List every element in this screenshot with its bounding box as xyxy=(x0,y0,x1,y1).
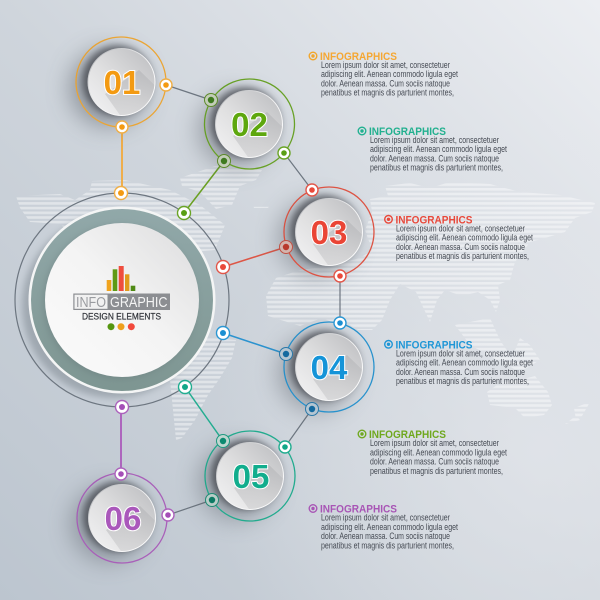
text block 05: dolor. Aenean massa. Cum sociis natoque xyxy=(370,457,499,467)
text block 02: adipiscing elit. Aenean commodo ligula eget xyxy=(370,144,507,154)
logo: dots xyxy=(108,323,135,330)
text block 02: dolor. Aenean massa. Cum sociis natoque xyxy=(370,153,499,163)
text block 01: INFOGRAPHICS xyxy=(320,51,397,63)
text block 04: dolor. Aenean massa. Cum sociis natoque xyxy=(396,367,525,377)
node 03 xyxy=(278,187,380,282)
text block 01: dolor. Aenean massa. Cum sociis natoque xyxy=(321,78,450,88)
text block 01: adipiscing elit. Aenean commodo ligula eget xyxy=(321,69,458,79)
text block 03: adipiscing elit. Aenean commodo ligula eget xyxy=(396,233,533,243)
node 05 xyxy=(199,431,301,526)
logo: bar chart xyxy=(107,266,135,291)
text block 03 xyxy=(385,214,533,261)
logo: subtitle: DESIGN ELEMENTS xyxy=(82,312,161,322)
central hub xyxy=(15,193,229,407)
node 06: 06 xyxy=(105,500,141,537)
text block 05: adipiscing elit. Aenean commodo ligula eget xyxy=(370,447,507,457)
node 04: 04 xyxy=(311,349,348,386)
text block 06 xyxy=(309,504,458,550)
node 01 xyxy=(70,37,172,132)
node 01: 01 xyxy=(104,64,140,101)
text block 05: Lorem ipsum dolor sit amet, consectetuer xyxy=(370,438,499,448)
text block 06: INFOGRAPHICS xyxy=(320,504,397,516)
node 02 xyxy=(198,79,300,174)
text block 04: Lorem ipsum dolor sit amet, consectetuer xyxy=(396,348,525,358)
connector dots: light xyxy=(114,79,346,521)
text block 05: penatibus et magnis dis parturient montes, xyxy=(370,466,503,476)
text block 06: penatibus et magnis dis parturient montes, xyxy=(321,540,454,550)
node 06 xyxy=(71,473,173,568)
text block 01: penatibus et magnis dis parturient montes, xyxy=(321,88,454,98)
node 03: 03 xyxy=(311,214,347,251)
world map xyxy=(0,160,600,450)
grey connectors xyxy=(166,85,340,515)
text block 04: penatibus et magnis dis parturient montes, xyxy=(396,376,529,386)
text block 01 xyxy=(309,51,458,98)
text block 04: adipiscing elit. Aenean commodo ligula eget xyxy=(396,358,533,368)
logo: wordmark xyxy=(73,294,170,311)
text block 04 xyxy=(385,339,533,386)
text block 03: Lorem ipsum dolor sit amet, consectetuer xyxy=(396,224,525,234)
logo: wordmark: INFO xyxy=(76,295,106,311)
text block 06: Lorem ipsum dolor sit amet, consectetuer xyxy=(321,513,450,523)
node 02: 02 xyxy=(231,106,268,143)
text block 05 xyxy=(358,429,507,476)
text block 04: INFOGRAPHICS xyxy=(396,339,472,351)
text block 02 xyxy=(358,126,507,173)
text block 03: penatibus et magnis dis parturient montes, xyxy=(396,251,529,261)
node 04 xyxy=(278,322,380,417)
logo: wordmark: GRAPHIC xyxy=(110,295,168,311)
text block 01: Lorem ipsum dolor sit amet, consectetuer xyxy=(321,60,450,70)
node 05: 05 xyxy=(233,458,269,495)
text block 02: Lorem ipsum dolor sit amet, consectetuer xyxy=(370,135,499,145)
text block 05: INFOGRAPHICS xyxy=(369,429,446,441)
coloured connectors xyxy=(121,127,286,474)
text block 06: adipiscing elit. Aenean commodo ligula eget xyxy=(321,522,458,532)
connector dots: dark xyxy=(204,94,318,506)
text block 02: penatibus et magnis dis parturient montes, xyxy=(370,163,503,173)
text block 06: dolor. Aenean massa. Cum sociis natoque xyxy=(321,531,450,541)
text block 03: INFOGRAPHICS xyxy=(396,214,472,226)
text block 03: dolor. Aenean massa. Cum sociis natoque xyxy=(396,242,525,252)
text block 02: INFOGRAPHICS xyxy=(369,126,446,138)
